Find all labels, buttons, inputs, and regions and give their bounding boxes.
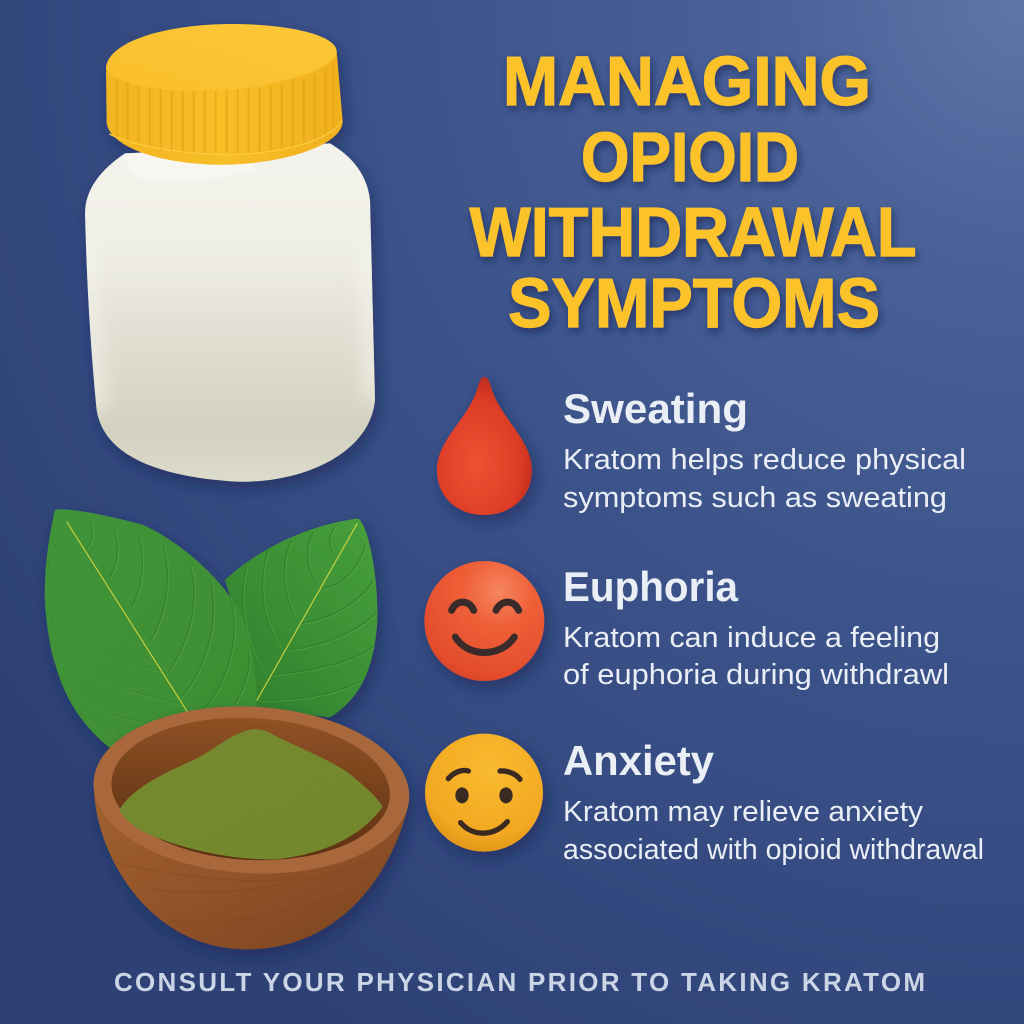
title: SYMPTOMS	[508, 264, 880, 342]
bottle edge glow	[85, 243, 375, 410]
text block: euphoria: Kratom can induce a feeling	[563, 622, 940, 654]
cap skirt	[106, 52, 343, 165]
text block: sweating: Sweating	[563, 385, 748, 432]
bottle	[85, 24, 375, 482]
text block: sweating: Kratom helps reduce physical	[563, 444, 966, 476]
wood grain	[117, 860, 370, 922]
icon: calm face	[425, 734, 543, 852]
title	[470, 42, 916, 342]
cap ridges	[117, 63, 333, 154]
kratom leaves	[45, 509, 378, 752]
text block: anxiety	[563, 737, 984, 866]
footer note: CONSULT YOUR PHYSICIAN PRIOR TO TAKING KRATOM	[114, 967, 925, 997]
bowl rim	[89, 699, 413, 881]
left leaf	[45, 509, 257, 752]
bowl inside	[108, 711, 394, 867]
text block: euphoria: of euphoria during withdrawl	[563, 659, 949, 691]
cap top	[106, 24, 337, 91]
bowl body	[94, 790, 409, 949]
text block: sweating	[563, 385, 966, 514]
bottle body	[85, 143, 375, 482]
bowl with powder	[89, 699, 413, 949]
icon: smiling face	[424, 561, 544, 681]
cap bead	[109, 121, 342, 155]
icon: red drop	[437, 377, 532, 515]
title: MANAGING	[503, 42, 871, 120]
text block: anxiety: Kratom may relieve anxiety	[563, 796, 924, 828]
title: WITHDRAWAL	[470, 193, 916, 271]
title: OPIOID	[581, 118, 799, 196]
text block: anxiety: associated with opioid withdrawal	[563, 834, 984, 866]
right leaf	[225, 518, 378, 717]
text block: anxiety: Anxiety	[563, 737, 715, 784]
text block: euphoria: Euphoria	[563, 563, 739, 610]
kratom powder	[119, 729, 383, 859]
text block: euphoria	[563, 563, 949, 691]
bottle neck	[125, 153, 257, 182]
text block: sweating: symptoms such as sweating	[563, 482, 947, 514]
